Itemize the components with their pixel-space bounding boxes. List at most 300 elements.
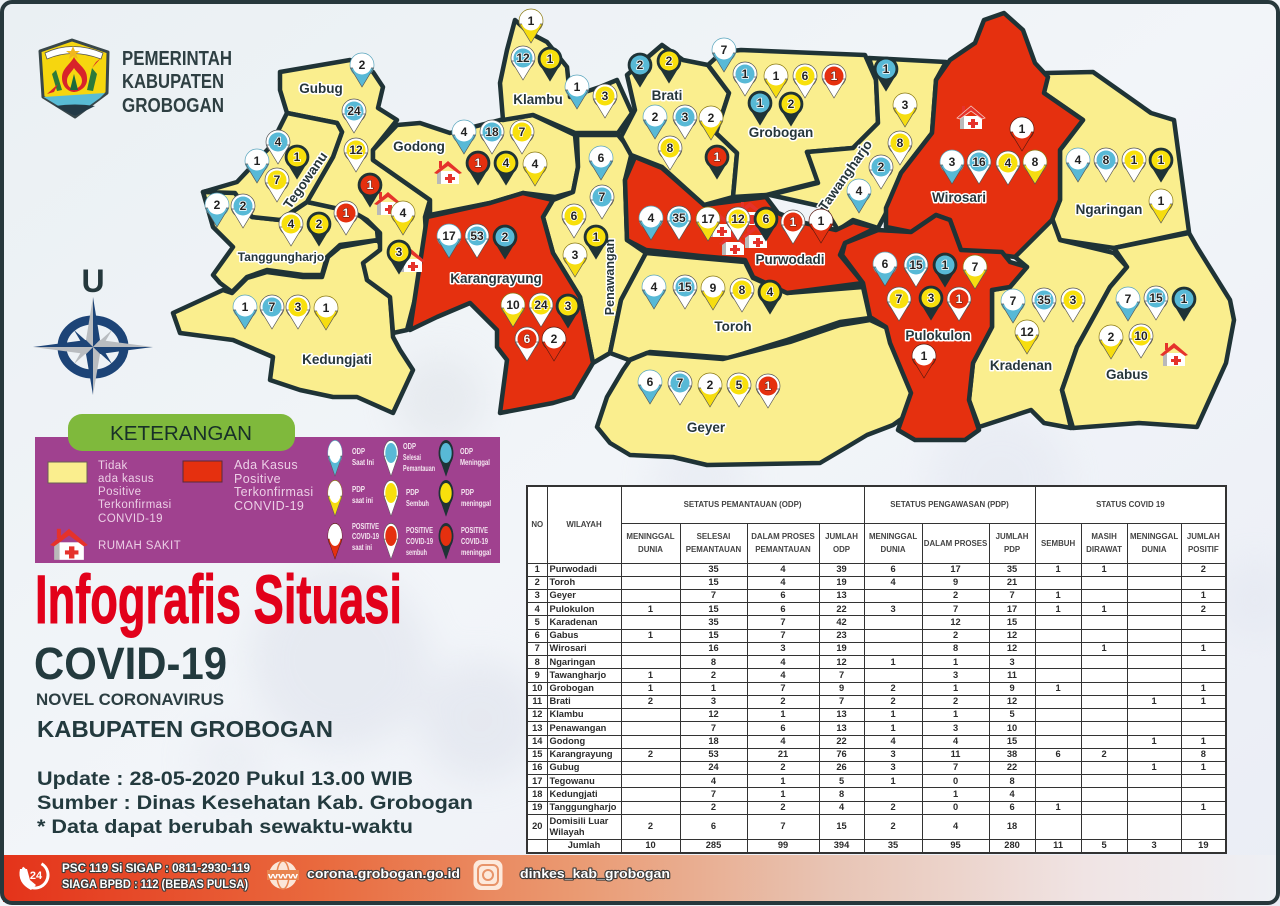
table: status data per wilayah: 2 [1201,564,1206,574]
table: status data per wilayah: 3 [711,696,716,706]
panel: legend [35,414,500,563]
markers: Purwodadi: 17 [701,212,715,226]
table: status data per wilayah: 12 [1007,643,1017,653]
table: status data per wilayah: 1 [648,630,653,640]
markers: Toroh: 8 [739,283,746,297]
legend: red swatch: Positive [234,472,281,486]
legend: pin labels: COVID-19 [352,532,379,541]
table: status data per wilayah: 11 [1053,840,1063,850]
markers: Pulokulon: 3 [928,291,935,305]
table: status data per wilayah: 6 [1009,802,1015,812]
legend: pin labels: ODP [460,447,473,456]
table: status data per wilayah: 35 [708,564,719,574]
markers: Klambu [511,9,617,118]
table: status data per wilayah: 1 [1151,696,1157,706]
table: status data per wilayah: DALAM PROSES [924,538,987,548]
table: status data per wilayah: 21 [1007,577,1017,587]
table: status data per wilayah: 4 [780,736,786,746]
table: status data per wilayah: 12 [532,709,542,719]
table: status data per wilayah: 19 [1198,840,1209,850]
text block: update info: * Data dapat berubah sewaktu-waktu [37,816,413,838]
table: status data per wilayah: 1 [890,709,896,719]
district: Godong [373,115,578,215]
table: status data per wilayah: 2 [711,802,716,812]
table: status data per wilayah: 0 [953,802,958,812]
markers: Pulokulon: 7 [896,292,903,306]
table: status data per wilayah: 1 [648,683,653,693]
table: status data per wilayah: 2 [780,762,786,772]
table: status data per wilayah: 35 [1007,564,1017,574]
icon: compass with north letter U [33,263,153,395]
table: status data per wilayah: 12 [836,656,847,666]
table: status data per wilayah: 3 [890,762,896,772]
table: status data per wilayah: 19 [532,802,542,812]
table: status data per wilayah: 12 [950,617,961,627]
table: status data per wilayah: 1 [1201,696,1206,706]
table: status data per wilayah: 0 [953,776,958,786]
table: status data per wilayah: WILAYAH [566,520,602,529]
table: status data per wilayah: Karadenan [550,617,598,627]
district: Pulokulon: Pulokulon [905,328,971,343]
legend: yellow swatch: CONVID-19 [98,513,163,525]
legend: pin labels: Meninggal [460,458,490,467]
legend: pin labels: sembuh [406,548,427,557]
table: status data per wilayah: 7 [780,821,786,831]
table: status data per wilayah: SETATUS PENGAWASAN (PDP) [890,500,1009,509]
icon: www globe: www [266,870,299,880]
markers: Klambu: 1 [528,14,535,28]
markers: Wirosari: 8 [1032,155,1039,169]
footer bar [3,855,1277,902]
icon: instagram [474,860,502,890]
legend: pin labels: COVID-19 [461,537,488,546]
table: status data per wilayah: 2 [648,749,653,759]
table: status data per wilayah: 1 [1055,802,1061,812]
legend: yellow swatch: Tidak [98,460,128,472]
district: Brati [621,45,737,205]
table: status data per wilayah: 2 [890,683,896,693]
markers: Grobogan [712,38,846,126]
markers: Pulokulon: 1 [956,292,963,306]
markers: Brati: 2 [708,111,715,125]
table: status data per wilayah: 1 [1055,564,1061,574]
table: status data per wilayah: 2 [890,696,896,706]
table: status data per wilayah: 1 [890,656,896,666]
table: status data per wilayah: 1 [1101,564,1107,574]
markers: Ngaringan [1066,148,1173,223]
table: status data per wilayah: 26 [836,762,847,772]
markers: Pulokulon [873,252,987,378]
table: status data per wilayah: 2 [890,802,896,812]
table: status data per wilayah: 7 [1009,590,1015,600]
heading: Keterangan pill [68,414,295,451]
district: Geyer [597,320,913,465]
markers: Tegowanu: 7 [274,173,281,187]
markers: Toroh [642,275,782,314]
markers: Penawangan: 7 [599,190,606,204]
table: status data per wilayah: 3 [953,723,958,733]
legend: yellow swatch: ada kasus [98,473,154,485]
markers: Tawangharjo: 8 [897,136,904,150]
table: status data per wilayah: JUMLAH ODP [825,532,858,554]
table: status data per wilayah: Ngaringan [550,656,595,666]
text: instagram handle: dinkes_kab_grobogan [520,866,670,881]
table: status data per wilayah: Karangrayung [550,749,613,759]
table: status data per wilayah: 4 [711,776,716,786]
markers: Grobogan: 2 [788,97,795,111]
markers: Toroh: 4 [767,285,774,299]
markers: Ngaringan: 4 [1075,153,1082,167]
legend: red swatch: Terkonfirmasi [234,485,314,499]
table: status data per wilayah: 4 [535,604,540,614]
district: Karangrayung [410,193,593,413]
icon: phone 24 [17,857,53,893]
table: status data per wilayah: DALAM PROSES PEMANTAUAN [751,532,815,554]
markers: Grobogan: 1 [742,67,749,81]
table: status data per wilayah: 1 [1151,762,1157,772]
markers: Wirosari: 16 [972,155,986,169]
markers: Gabus: 10 [1134,329,1148,343]
legend: pin labels: meninggal [461,499,491,508]
markers: Karangrayung: 2 [551,332,558,346]
legend: yellow swatch: Positive [98,486,141,498]
markers: Grobogan: 1 [831,69,838,83]
table: status data per wilayah: 8 [839,789,844,799]
legend: hospital [50,529,181,560]
district: Klambu [500,20,632,133]
legend: pin labels: PDP [406,488,420,497]
table: status data per wilayah: 9 [535,670,540,680]
table: status data per wilayah: Kedungjati [550,789,598,799]
table: status data per wilayah: 8 [1009,776,1015,786]
table: status data per wilayah: SELESAI PEMANTAUAN [686,532,741,554]
district: Wirosari: Wirosari [932,190,986,205]
markers: Pulokulon: 6 [882,257,889,271]
table: status data per wilayah: 1 [1201,736,1206,746]
subheading: Novel Coronavirus: NOVEL CORONAVIRUS [36,691,224,709]
district: Toroh [610,253,870,360]
table: status data per wilayah: 15 [708,577,719,587]
table: status data per wilayah: Klambu [550,709,584,719]
markers: Geyer: 6 [647,375,654,389]
table: status data per wilayah: 3 [890,604,896,614]
markers: Wirosari: 1 [1019,122,1026,136]
markers: Brati: 3 [682,110,689,124]
table: status data per wilayah: 1 [1055,604,1061,614]
legend: yellow swatch [48,460,172,525]
table: status data per wilayah: 19 [836,577,847,587]
legend: pin labels: ODP [403,442,416,451]
table: status data per wilayah: 285 [706,840,721,850]
district: Purwodadi: Purwodadi [755,252,825,267]
table: status data per wilayah: Gubug [550,762,579,772]
table: status data per wilayah: 1 [1055,683,1061,693]
markers: Grobogan: 6 [802,69,809,83]
table: status data per wilayah: SEMBUH [1041,538,1075,548]
table: status data per wilayah: 8 [535,656,540,666]
district: Tawangharjo [770,58,946,230]
table: status data per wilayah: 2 [535,577,540,587]
table: status data per wilayah: Pulokulon [550,604,594,614]
heading: Pemerintah Kabupaten Grobogan [122,48,232,117]
district: Pulokulon [842,215,1027,440]
table: status data per wilayah: 7 [711,723,716,733]
table: status data per wilayah: 4 [780,670,786,680]
table: status data per wilayah: 1 [1201,802,1206,812]
table: status data per wilayah: 15 [1007,617,1017,627]
table: status data per wilayah: 1 [535,564,540,574]
table: status data per wilayah: 2 [780,696,786,706]
table: status data per wilayah: 2 [780,802,786,812]
table: status data per wilayah: 12 [1007,696,1017,706]
table: status data per wilayah: 22 [1007,762,1017,772]
table: status data per wilayah: Tegowanu [550,776,595,786]
table: status data per wilayah: MASIH DIRAWAT [1086,532,1122,554]
markers: Purwodadi: 1 [790,215,797,229]
district: Ngaringan: Ngaringan [1076,202,1142,217]
table: status data per wilayah: 1 [1201,762,1206,772]
district: Kedungjati [173,240,413,413]
markers: Godong: 7 [519,125,526,139]
table: status data per wilayah: MENINGGAL DUNIA [1130,532,1178,554]
table: status data per wilayah: 38 [1007,749,1017,759]
markers: Brati [628,49,729,179]
table: status data per wilayah: Purwodadi [550,564,597,574]
markers: Godong: 1 [475,156,482,170]
markers: Tanggungharjo: 4 [288,217,295,231]
markers: Geyer: 5 [736,378,743,392]
district: Karangrayung: Karangrayung [450,271,542,286]
table: status data per wilayah: 7 [839,670,844,680]
table: status data per wilayah: 6 [711,821,716,831]
table: status data per wilayah: 53 [708,749,719,759]
district: Tawangharjo: Tawangharjo [816,137,875,213]
markers: Gubug: 3 [396,245,403,259]
table: status data per wilayah: 4 [839,802,844,812]
table: status data per wilayah: Grobogan [550,683,594,693]
subheading: Kabupaten Grobogan: KABUPATEN GROBOGAN [37,716,333,742]
table: status data per wilayah: 2 [711,670,716,680]
table: status data per wilayah: 4 [780,564,786,574]
table: status data per wilayah: 5 [1101,840,1107,850]
table: status data per wilayah: 17 [950,564,961,574]
markers: Kradenan: 12 [1020,325,1034,339]
table: status data per wilayah: 6 [535,630,540,640]
table: status data per wilayah: 2 [953,630,958,640]
table: status data per wilayah: 1 [780,789,786,799]
district: Wirosari [886,13,1083,257]
table: status data per wilayah: 1 [1055,590,1061,600]
legend: pin labels: PDP [461,488,475,497]
legend: pin labels: COVID-19 [406,537,433,546]
markers: Karangrayung: 2 [502,230,509,244]
table: status data per wilayah: 3 [535,590,540,600]
markers: Penawangan: 6 [598,151,605,165]
text: hotline numbers [62,863,250,891]
markers: Brati: 2 [637,58,644,72]
markers: Tegowanu: 4 [275,135,282,149]
district: Tegowanu: Tegowanu [280,149,330,212]
table: status data per wilayah: 2 [890,821,896,831]
district: Kradenan [969,218,1127,428]
table: status data per wilayah: NO [531,520,543,529]
markers: Pulokulon: 1 [942,258,949,272]
legend: pin labels: Selesai [403,453,421,462]
table: status data per wilayah: Penawangan [550,723,606,733]
table: status data per wilayah: 7 [780,617,786,627]
table: status data per wilayah: 11 [951,749,960,759]
table: status data per wilayah [526,485,1227,854]
markers: Penawangan: 1 [593,230,600,244]
table: status data per wilayah: MENINGGAL DUNIA [869,532,917,554]
table: status data per wilayah: 2 [1101,749,1107,759]
legend: pin keys [328,440,453,559]
table: status data per wilayah: 7 [953,762,958,772]
icon: hospital houses on map [374,106,1188,366]
map of districts [173,13,1234,465]
legend: red swatch [183,458,314,513]
table: status data per wilayah: 11 [1007,670,1017,680]
table: status data per wilayah: 17 [1007,604,1017,614]
logo: Kabupaten Grobogan shield [40,40,108,117]
markers: Gabus: 7 [1125,292,1132,306]
table: status data per wilayah: Wilayah [550,827,585,837]
text: website: corona.grobogan.go.id [307,866,460,881]
table: status data per wilayah: 7 [711,590,716,600]
table: status data per wilayah: 1 [648,604,653,614]
district: Godong: Godong [393,139,445,154]
table: status data per wilayah: 1 [953,709,958,719]
table: status data per wilayah: 1 [1151,736,1157,746]
table: status data per wilayah: 16 [708,643,719,653]
markers: Gubug: 24 [347,104,361,118]
table: status data per wilayah: 99 [778,840,788,850]
markers: Brati: 1 [714,150,721,164]
markers: Tanggungharjo: 2 [316,217,323,231]
table: status data per wilayah: JUMLAH POSITIF [1187,532,1220,554]
heading: Pemerintah Kabupaten Grobogan: KABUPATEN [122,71,224,93]
legend: pin labels: Pemantauan [403,464,435,473]
markers: Gabus: 1 [1181,292,1188,306]
table: status data per wilayah: 1 [890,723,896,733]
markers: Karangrayung: 10 [506,298,520,312]
markers: Gubug: 2 [359,58,366,72]
heading: Pemerintah Kabupaten Grobogan: PEMERINTAH [122,48,232,70]
table: status data per wilayah: 19 [836,643,847,653]
table: status data per wilayah: 17 [532,776,542,786]
table: status data per wilayah: 13 [532,723,542,733]
title: Infografis Situasi: Infografis Situasi [35,561,402,638]
table: status data per wilayah: 1 [780,776,786,786]
table: status data per wilayah: 35 [708,617,719,627]
markers: Penawangan: 3 [572,248,579,262]
table: status data per wilayah: Brati [550,696,571,706]
table: status data per wilayah: 1 [953,683,958,693]
markers: Tawangharjo: 3 [902,98,909,112]
markers: Kradenan [1001,288,1085,354]
markers: Purwodadi: 6 [763,212,770,226]
table: status data per wilayah: 9 [839,683,844,693]
markers: Gubug: 1 [367,178,374,192]
markers: Geyer: 7 [677,376,684,390]
table: status data per wilayah: 9 [1009,683,1015,693]
markers: Klambu: 1 [547,52,554,66]
text block: update info: Update : 28-05-2020 Pukul 13.00 WIB [37,768,413,790]
table: status data per wilayah: Geyer [550,590,576,600]
markers: Toroh: 9 [710,281,717,295]
table: status data per wilayah: MENINGGAL DUNIA [626,532,675,554]
table: status data per wilayah: 6 [780,604,786,614]
table: status data per wilayah: 1 [1201,683,1206,693]
table: status data per wilayah: 1 [1201,590,1206,600]
markers: Karangrayung: 6 [524,332,531,346]
table: status data per wilayah: Wirosari [550,643,587,653]
markers: Kedungjati: 7 [269,300,276,314]
table: status data per wilayah: 1 [953,789,958,799]
table: status data per wilayah: 2 [953,590,958,600]
markers: Kradenan: 3 [1070,293,1077,307]
district: Tanggungharjo [203,190,378,292]
district: Kradenan: Kradenan [990,358,1052,373]
legend: yellow swatch: Terkonfirmasi [98,499,172,511]
table: status data per wilayah: 1 [890,776,896,786]
markers: Godong [452,120,547,186]
table: status data per wilayah: 76 [836,749,847,759]
district: Gubug [280,60,430,333]
table: status data per wilayah: 5 [535,617,540,627]
legend: pin labels: POSITIVE [461,526,488,535]
markers: Kradenan: 7 [1010,294,1017,308]
markers: Klambu: 1 [574,80,581,94]
table: status data per wilayah: 18 [532,789,542,799]
table: status data per wilayah: 8 [1201,749,1206,759]
table: status data per wilayah: Domisili Luar [550,816,608,826]
markers: Pulokulon: 1 [921,349,928,363]
markers: Tanggungharjo: 2 [214,198,221,212]
district: Gabus [1062,233,1234,428]
markers: Wirosari: 3 [949,155,956,169]
markers: Tegowanu: 1 [254,154,261,168]
markers: Ngaringan: 1 [1131,153,1138,167]
table: status data per wilayah: 10 [532,683,542,693]
markers: Wirosari: 4 [1005,156,1012,170]
markers: Tanggungharjo: 2 [240,199,247,213]
district: Ngaringan [1044,72,1189,248]
district: Purwodadi [625,157,876,293]
table: status data per wilayah: Tawangharjo [550,670,606,680]
table: status data per wilayah: 15 [708,630,719,640]
heading: Pemerintah Kabupaten Grobogan: GROBOGAN [122,95,224,117]
table: status data per wilayah: 6 [780,723,786,733]
markers: Purwodadi: 4 [648,211,655,225]
table: status data per wilayah: 3 [1151,840,1157,850]
table: status data per wilayah: 15 [836,821,847,831]
text block: update info: Sumber : Dinas Kesehatan Kab. Grobogan [37,792,473,814]
table: status data per wilayah: 3 [1009,656,1015,666]
table: status data per wilayah: 15 [708,604,719,614]
markers: Gubug [342,53,415,274]
markers: Brati: 8 [667,141,674,155]
markers: Brati: 2 [652,110,659,124]
legend: pin labels: ODP [352,447,365,456]
legend: hospital: RUMAH SAKIT [98,540,181,552]
legend: pin labels: POSITIVE [406,526,433,535]
markers: Gabus: 15 [1149,291,1163,305]
markers: Karangrayung: 3 [565,299,572,313]
markers: Geyer: 2 [707,378,714,392]
markers: Toroh: 4 [651,280,658,294]
legend: pin labels: Sembuh [406,499,429,508]
